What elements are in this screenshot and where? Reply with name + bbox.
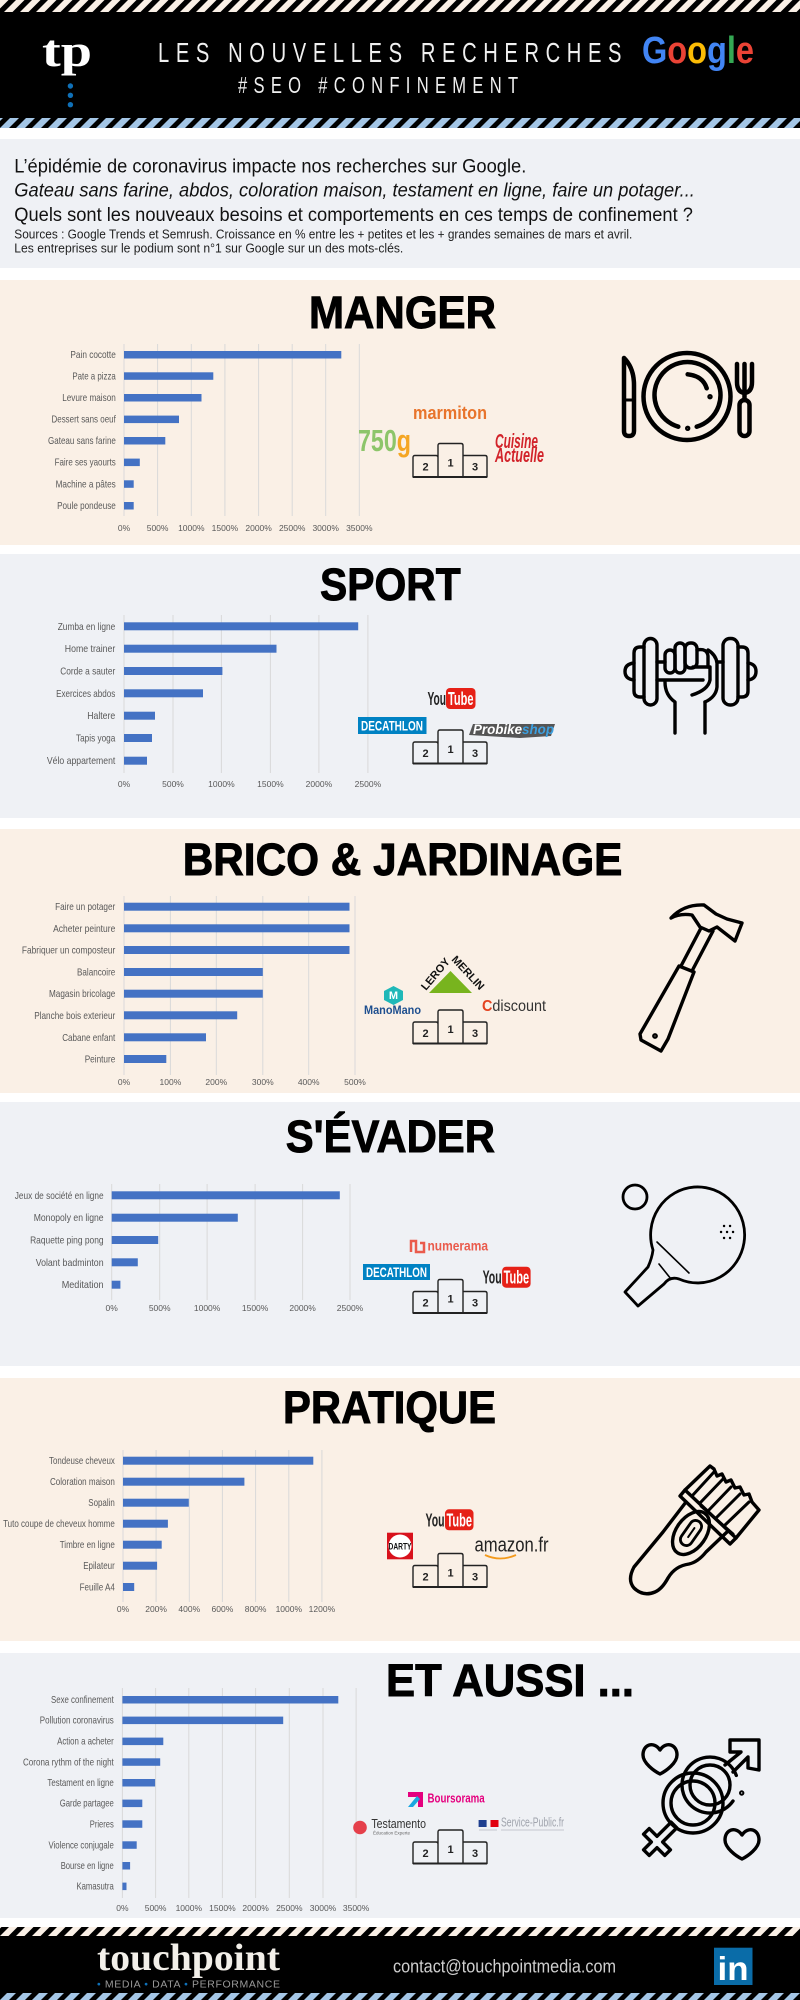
- heading: sport: SPORT: [320, 559, 461, 610]
- bar chart: manger: Faire ses yaourts: [55, 457, 116, 469]
- logo: decathlon: [358, 717, 426, 734]
- bar chart: manger: 1000%: [178, 523, 205, 533]
- logo: manomano: [364, 986, 421, 1017]
- logo: numerama: numerama: [428, 1238, 488, 1254]
- contact email: contact@touchpointmedia.com: [393, 1957, 616, 1977]
- podium: 3: [472, 1848, 478, 1860]
- panel: manger: [0, 280, 800, 545]
- bar chart: et aussi: 0%: [116, 1903, 129, 1913]
- bar chart: brico: Balancoire: [77, 966, 115, 978]
- podium: 1: [447, 1294, 454, 1306]
- tagline: • MEDIA • DATA • PERFORMANCE: [97, 1978, 280, 1990]
- bar chart: et aussi: 2500%: [276, 1903, 303, 1913]
- podium: 2: [422, 1298, 429, 1310]
- bar chart: et aussi: 500%: [145, 1903, 167, 1913]
- bar chart: manger: 3000%: [312, 523, 339, 533]
- bar chart: evader: Jeux de société en ligne: [15, 1190, 104, 1202]
- bar chart: pratique: 0%: [117, 1604, 130, 1614]
- heading: s'evader: S'ÉVADER: [286, 1111, 495, 1162]
- podium: 2: [422, 462, 429, 474]
- bar chart: sport: 1000%: [208, 779, 235, 789]
- bar chart: pratique: Sopalin: [88, 1497, 115, 1509]
- bar chart: et aussi: 3000%: [310, 1903, 337, 1913]
- bar chart: et aussi: Prieres: [90, 1818, 114, 1830]
- podium: [413, 444, 487, 477]
- bar chart: et aussi: 1000%: [176, 1903, 202, 1913]
- bar chart: et aussi: Sexe confinement: [51, 1694, 114, 1706]
- podium: [413, 730, 487, 764]
- logo: darty: DARTY: [388, 1542, 412, 1552]
- logo: leroy merlin: [419, 954, 486, 993]
- bar chart: evader: 2000%: [289, 1303, 316, 1313]
- bar chart: brico: 300%: [252, 1077, 274, 1087]
- bar chart: sport: Home trainer: [65, 643, 116, 655]
- logo: youtube: You: [428, 689, 446, 709]
- icon: linkedin: in: [718, 1950, 748, 1987]
- bar chart: manger: Machine a pâtes: [56, 478, 116, 490]
- logo: youtube: [428, 688, 476, 709]
- bar chart: sport: 2500%: [355, 779, 382, 789]
- bar chart: pratique: Feuille A4: [80, 1582, 115, 1594]
- podium: 2: [422, 1848, 429, 1860]
- bar chart: pratique: 1000%: [276, 1604, 302, 1614]
- logo: amazon.fr: amazon.fr: [474, 1535, 549, 1557]
- logo: testamento: [353, 1816, 426, 1836]
- podium: 2: [422, 1572, 429, 1584]
- bar chart: pratique: Epilateur: [83, 1560, 115, 1572]
- icon: hammer: [640, 905, 742, 1051]
- panel: sport: [0, 554, 800, 818]
- main title: LES NOUVELLES RECHERCHES: [158, 38, 621, 69]
- bar chart: brico: [22, 896, 366, 1087]
- bar chart: pratique: Timbre en ligne: [60, 1539, 115, 1551]
- bar chart: pratique: Tondeuse cheveux: [49, 1455, 115, 1467]
- bar chart: brico: 400%: [298, 1077, 320, 1087]
- bar chart: evader: Meditation: [62, 1279, 104, 1291]
- podium: [413, 1010, 487, 1044]
- logo: boursorama: [408, 1791, 485, 1807]
- bar chart: evader: 1500%: [242, 1303, 269, 1313]
- podium: 1: [447, 1568, 454, 1580]
- bar chart: pratique: Tuto coupe de cheveux homme: [3, 1518, 115, 1530]
- bar chart: brico: Fabriquer un composteur: [22, 944, 116, 956]
- logo: youtube: [483, 1267, 531, 1288]
- intro line 3: Quels sont les nouveaux besoins et comportements en ces temps de confinement ?: [14, 205, 693, 226]
- logo: darty: [387, 1533, 413, 1559]
- bar chart: pratique: 1200%: [309, 1604, 336, 1614]
- footer banner: [0, 1927, 800, 2000]
- logo: 750g: 750g: [358, 423, 411, 458]
- bar chart: pratique: Coloration maison: [50, 1476, 115, 1488]
- logo: decathlon: DECATHLON: [366, 1264, 427, 1280]
- bar chart: brico: Peinture: [85, 1054, 115, 1066]
- icon: hair clipper: [630, 1466, 759, 1594]
- logo: youtube: Tube: [446, 1510, 472, 1530]
- bar chart: evader: Raquette ping pong: [30, 1234, 104, 1246]
- logo: cuisine actuelle: [494, 431, 544, 467]
- bar chart: sport: 0%: [118, 779, 131, 789]
- podium: 3: [472, 1028, 478, 1040]
- logo: youtube: Tube: [448, 689, 474, 709]
- bar chart: et aussi: Pollution coronavirus: [40, 1715, 114, 1727]
- bar chart: evader: Volant badminton: [36, 1257, 104, 1269]
- panel: introduction: [0, 139, 800, 268]
- bar chart: brico: Magasin bricolage: [49, 988, 115, 1000]
- podium: [413, 1280, 487, 1313]
- bar chart: sport: Zumba en ligne: [58, 621, 115, 633]
- logo: manomano: M: [389, 990, 398, 1002]
- bar chart: evader: [15, 1184, 364, 1313]
- hashtag subtitle: #SEO #CONFINEMENT: [238, 73, 518, 99]
- bar chart: pratique: 200%: [145, 1604, 167, 1614]
- bar chart: pratique: 600%: [212, 1604, 234, 1614]
- bar chart: sport: Exercices abdos: [56, 688, 115, 700]
- bar chart: sport: 1500%: [257, 779, 284, 789]
- sources note: Sources : Google Trends et Semrush. Croissance en % entre les + petites et les + grandes semaines de mars et avril.: [14, 227, 632, 242]
- panel: s'evader: [0, 1102, 800, 1366]
- podium: 3: [472, 748, 478, 760]
- bar chart: et aussi: 3500%: [343, 1903, 370, 1913]
- bar chart: et aussi: Violence conjugale: [48, 1839, 114, 1851]
- podium: 1: [447, 744, 454, 756]
- sources note: [14, 227, 632, 256]
- bar chart: et aussi: Kamasutra: [76, 1881, 114, 1893]
- podium: 3: [472, 1572, 478, 1584]
- bar chart: et aussi: Corona rythm of the night: [23, 1756, 114, 1768]
- bar chart: manger: 2000%: [245, 523, 272, 533]
- podium: [413, 1554, 487, 1587]
- heading: pratique: PRATIQUE: [283, 1382, 496, 1433]
- bar chart: brico: Faire un potager: [55, 901, 116, 913]
- podium: [413, 1830, 487, 1864]
- bar chart: manger: Pain cocotte: [70, 349, 116, 361]
- bar chart: pratique: 400%: [178, 1604, 201, 1614]
- logo: cuisine actuelle: Actuelle: [494, 445, 544, 467]
- bar chart: et aussi: 2000%: [242, 1903, 269, 1913]
- podium: 2: [422, 748, 429, 760]
- logo: numerama: [411, 1238, 488, 1254]
- heading: manger: MANGER: [309, 287, 496, 338]
- Google logo: Google: [642, 30, 754, 72]
- intro line 1: L’épidémie de coronavirus impacte nos recherches sur Google.: [14, 157, 526, 178]
- podium: 1: [447, 458, 454, 470]
- bar chart: sport: 2000%: [306, 779, 333, 789]
- logo: manomano: ManoMano: [364, 1003, 421, 1017]
- bar chart: brico: Cabane enfant: [62, 1032, 115, 1044]
- logo: leroy merlin: MERLIN: [449, 954, 486, 993]
- bar chart: evader: Monopoly en ligne: [34, 1212, 104, 1224]
- bar chart: sport: [47, 615, 382, 789]
- panel: pratique: [0, 1378, 800, 1641]
- icon: table tennis paddle: [623, 1185, 745, 1306]
- bar chart: brico: Acheter peinture: [53, 923, 115, 935]
- sources note: Les entreprises sur le podium sont n°1 sur Google sur un des mots-clés.: [14, 241, 403, 256]
- icon: plate and cutlery: [624, 353, 752, 440]
- logo: service-public: [479, 1816, 564, 1830]
- podium: 1: [447, 1844, 454, 1856]
- icon: interlocked gender symbols and hearts: [636, 1740, 759, 1863]
- bar chart: manger: Poule pondeuse: [57, 500, 116, 512]
- bar chart: sport: 500%: [162, 779, 184, 789]
- intro line 2: Gateau sans farine, abdos, coloration maison, testament en ligne, faire un potager...: [14, 181, 695, 202]
- logo: youtube: You: [483, 1268, 502, 1288]
- bar chart: evader: 500%: [149, 1303, 171, 1313]
- logo: probikeshop: Probikeshop: [473, 721, 554, 737]
- logo: youtube: Tube: [504, 1268, 529, 1288]
- bar chart: manger: [48, 344, 373, 533]
- header banner: [0, 0, 800, 128]
- logo: boursorama: Boursorama: [428, 1791, 485, 1806]
- bar chart: evader: 0%: [106, 1303, 118, 1313]
- panel: et aussi: [0, 1653, 800, 1918]
- bar chart: sport: Vélo appartement: [47, 755, 115, 767]
- bar chart: manger: Pate a pizza: [72, 370, 116, 382]
- bar chart: manger: Dessert sans oeuf: [52, 414, 116, 426]
- bar chart: et aussi: Bourse en ligne: [61, 1860, 114, 1872]
- bar chart: sport: Haltere: [87, 710, 115, 722]
- bar chart: et aussi: 1500%: [209, 1903, 236, 1913]
- podium: 2: [422, 1028, 429, 1040]
- bar chart: brico: Planche bois exterieur: [34, 1010, 116, 1022]
- bar chart: manger: Gateau sans farine: [48, 435, 116, 447]
- bar chart: pratique: [3, 1450, 336, 1614]
- podium: 1: [447, 1024, 454, 1036]
- bar chart: manger: Levure maison: [62, 392, 116, 404]
- bar chart: et aussi: [23, 1688, 370, 1913]
- bar chart: brico: 500%: [344, 1077, 366, 1087]
- bar chart: brico: 100%: [160, 1077, 182, 1087]
- bar chart: evader: 2500%: [337, 1303, 364, 1313]
- logo: testamento: Testamento: [371, 1816, 426, 1831]
- bar chart: pratique: 800%: [245, 1604, 267, 1614]
- bar chart: et aussi: Garde partagee: [60, 1798, 114, 1810]
- logo: service-public: Service-Public.fr: [501, 1816, 564, 1830]
- bar chart: manger: 1500%: [212, 523, 239, 533]
- bar chart: manger: 3500%: [346, 523, 373, 533]
- panel: brico et jardinage: [0, 829, 800, 1093]
- touchpoint tp logo: [42, 25, 92, 107]
- bar chart: et aussi: Action a acheter: [57, 1736, 114, 1748]
- bar chart: manger: 0%: [118, 523, 131, 533]
- bar chart: sport: Corde a sauter: [60, 666, 116, 678]
- logo: youtube: You: [426, 1510, 444, 1530]
- heading: et aussi: ET AUSSI ...: [386, 1655, 634, 1706]
- bar chart: manger: 500%: [147, 523, 169, 533]
- logo: decathlon: DECATHLON: [361, 718, 423, 734]
- logo: testamento: Éducation Experte: [373, 1830, 410, 1836]
- bar chart: evader: 1000%: [194, 1303, 221, 1313]
- logo: cuisine actuelle: Cuisine: [495, 431, 538, 453]
- bar chart: sport: Tapis yoga: [76, 732, 115, 744]
- heading: brico et jardinage: BRICO & JARDINAGE: [183, 834, 622, 885]
- bar chart: brico: 0%: [118, 1077, 131, 1087]
- podium: 3: [472, 462, 478, 474]
- logo: leroy merlin: LEROY: [419, 956, 453, 993]
- bar chart: et aussi: Testament en ligne: [47, 1777, 114, 1789]
- icon: fist and dumbbell: [625, 638, 756, 733]
- logo: marmiton: marmiton: [413, 403, 487, 423]
- touchpoint tp logo: tp: [42, 25, 92, 76]
- touchpoint wordmark: touchpoint: [97, 1937, 280, 1979]
- podium: 3: [472, 1298, 478, 1310]
- logo: youtube: [426, 1509, 474, 1530]
- bar chart: manger: 2500%: [279, 523, 306, 533]
- logo: cdiscount: Cdiscount: [482, 998, 547, 1015]
- bar chart: brico: 200%: [205, 1077, 228, 1087]
